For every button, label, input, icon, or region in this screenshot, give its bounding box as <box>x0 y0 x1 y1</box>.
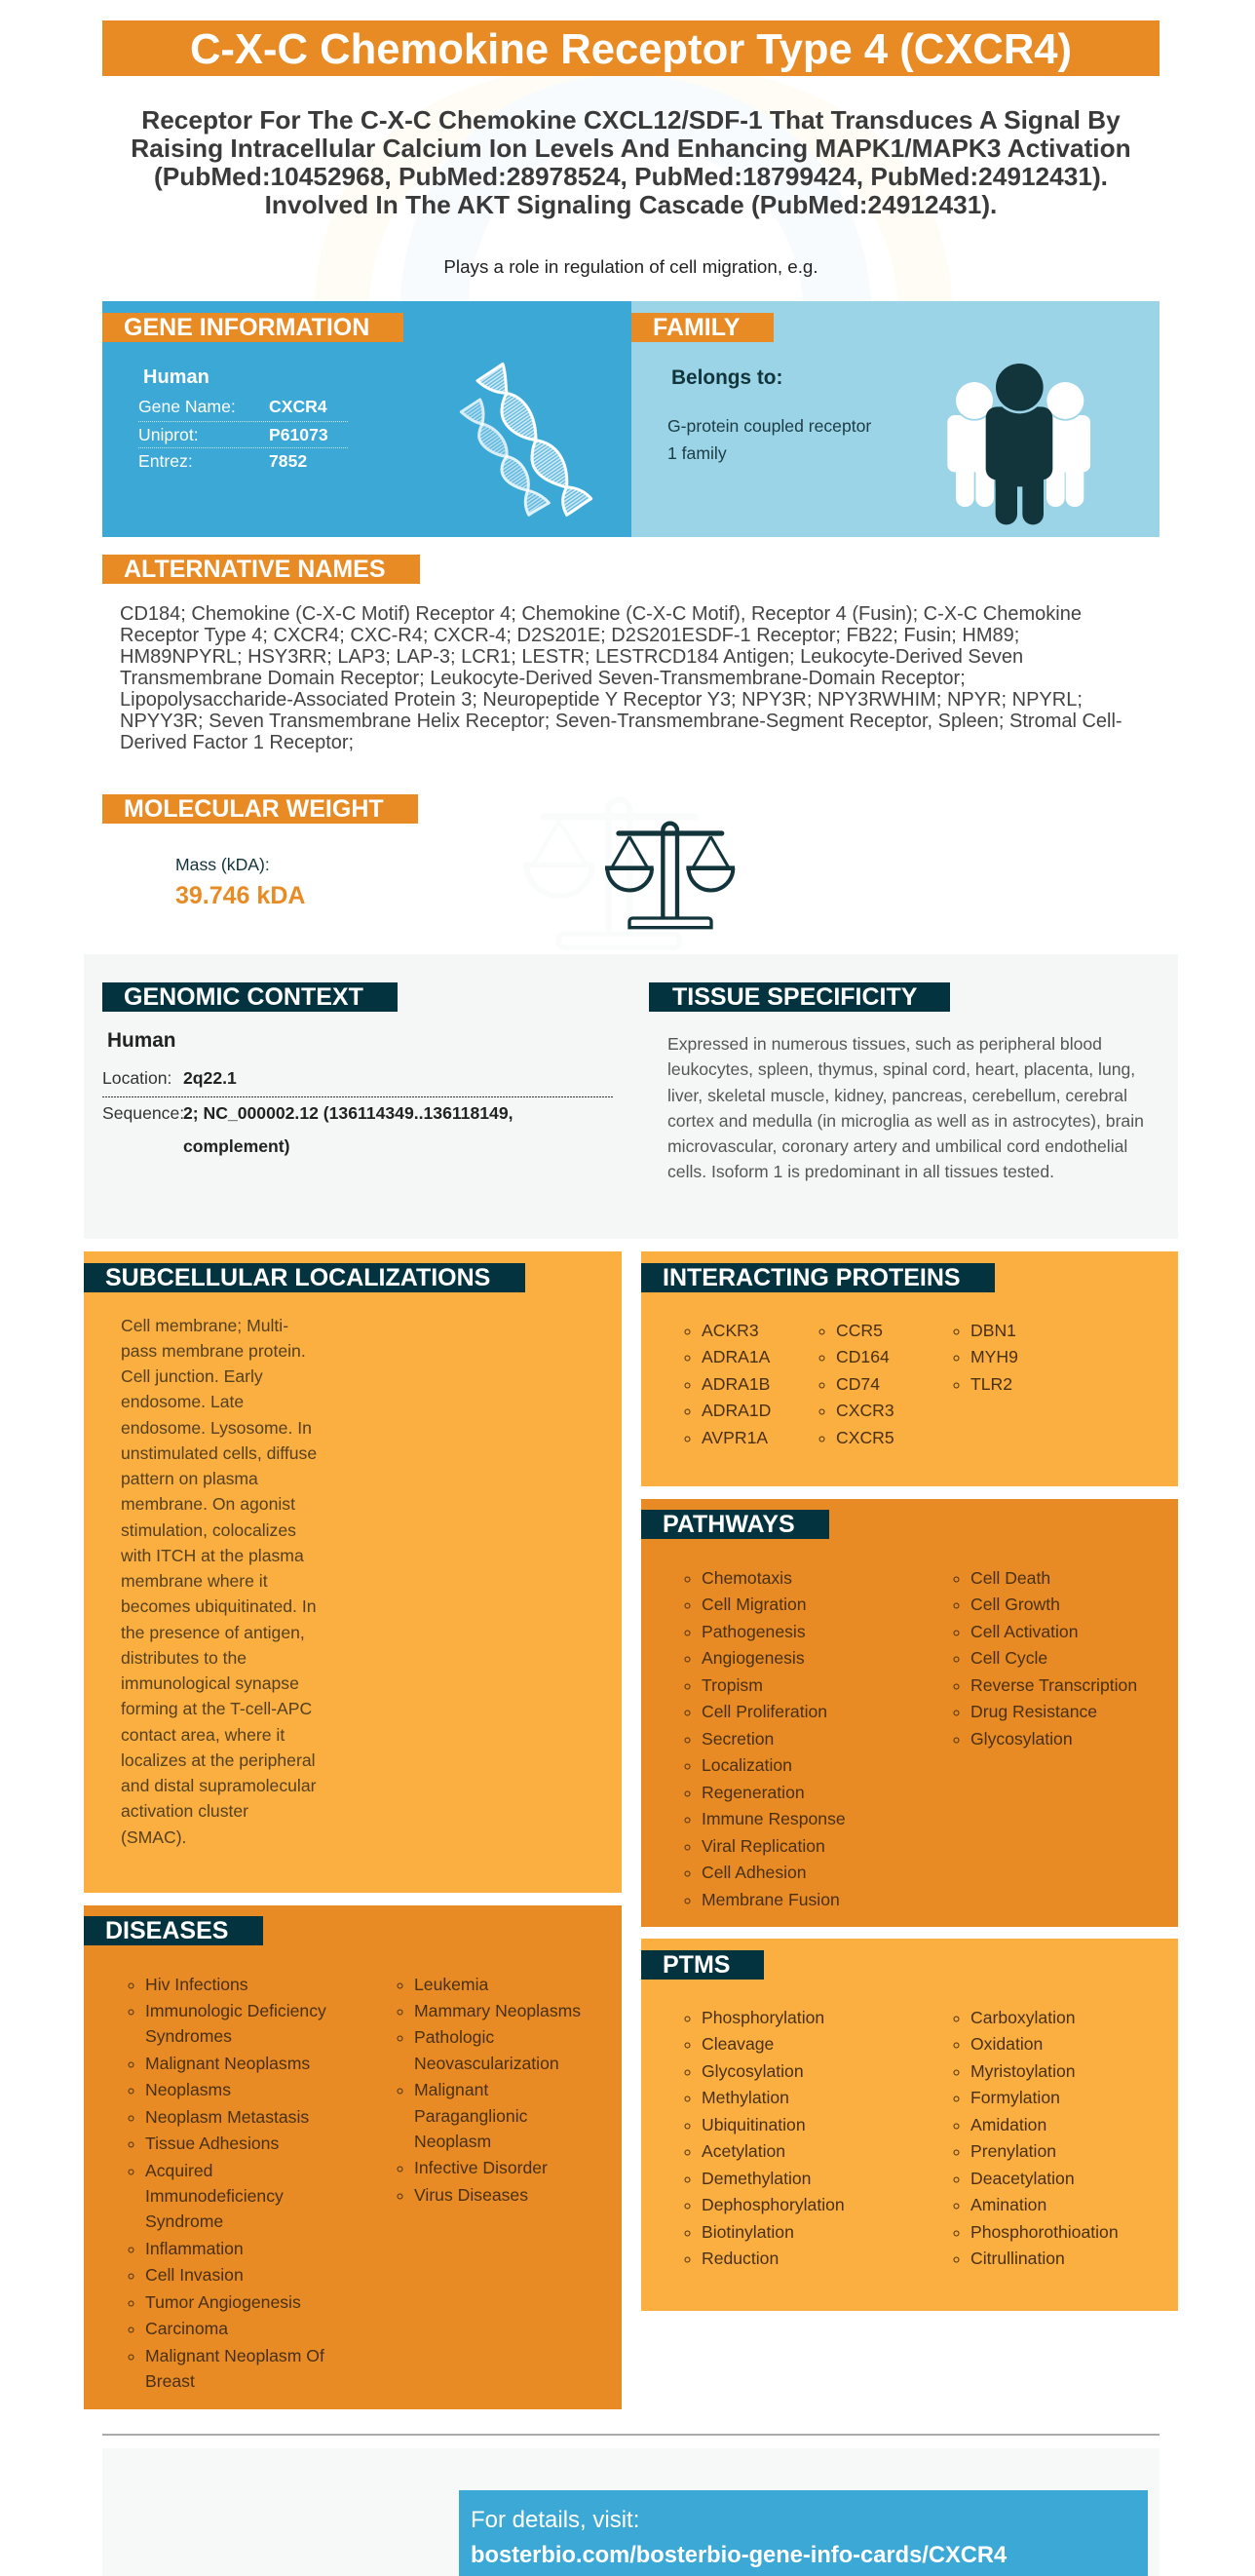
subcellular text: endosome. Late <box>121 1392 244 1411</box>
list: proteins column 3: TLR2 <box>970 1374 1012 1394</box>
subcellular text: contact area, where it <box>121 1725 285 1745</box>
subcellular text: forming at the T-cell-APC <box>121 1699 312 1718</box>
location row <box>102 1068 237 1088</box>
list: ptms column 2: Myristoylation <box>970 2061 1076 2081</box>
icon: dna <box>460 363 592 517</box>
list: diseases column 1: Malignant Neoplasms <box>145 2054 310 2073</box>
subcellular text: pass membrane protein. <box>121 1341 306 1361</box>
list: pathways column 1: Localization <box>702 1755 792 1775</box>
subcellular text <box>121 1316 317 1846</box>
list: ptms column 2: Prenylation <box>970 2141 1056 2161</box>
subtitle description: Raising Intracellular Calcium Ion Levels And Enhancing MAPK1/MAPK3 Activation <box>131 134 1131 163</box>
panel: ptms <box>641 1939 1178 2311</box>
panel: family <box>631 301 1160 537</box>
location row: Location: <box>102 1068 171 1088</box>
sequence row <box>102 1103 513 1156</box>
list: diseases column 1: Breast <box>145 2371 195 2391</box>
panel: diseases <box>84 1905 622 2409</box>
tissue specificity text: Expressed in numerous tissues, such as peripheral blood <box>667 1034 1102 1054</box>
list: diseases column 1: Acquired <box>145 2161 212 2180</box>
list: proteins column 2: CXCR5 <box>836 1428 894 1447</box>
list: diseases column 1: Syndromes <box>145 2026 232 2046</box>
callout: details link <box>459 2490 1148 2576</box>
mass label: Mass (kDA): <box>175 855 270 874</box>
function note: Plays a role in regulation of cell migration, e.g. <box>443 256 818 277</box>
background watermark <box>315 76 952 301</box>
list: ptms column 2: Phosphorothioation <box>970 2222 1119 2242</box>
list: ptms column 1: Ubiquitination <box>702 2115 806 2134</box>
list: pathways column 1: Tropism <box>702 1675 763 1695</box>
subcellular text: Cell junction. Early <box>121 1366 263 1386</box>
heading: gene information: GENE INFORMATION <box>124 314 369 341</box>
list: diseases column 1 <box>129 1975 326 2391</box>
heading: ptms: PTMS <box>663 1951 730 1979</box>
subcellular text: becomes ubiquitinated. In <box>121 1596 317 1616</box>
subcellular text: stimulation, colocalizes <box>121 1520 296 1540</box>
subtitle description: (PubMed:10452968, PubMed:28978524, PubMed:18799424, PubMed:24912431). <box>154 162 1108 191</box>
list: proteins column 1 <box>684 1321 771 1447</box>
list: pathways column 2: Cell Death <box>970 1568 1050 1588</box>
heading: diseases: DISEASES <box>105 1917 228 1944</box>
subcellular text: unstimulated cells, diffuse <box>121 1443 317 1463</box>
panel: subcellular localizations <box>84 1251 622 1893</box>
entrez row: 7852 <box>269 451 307 471</box>
alternative names text: HM89NPYRL; HSY3RR; LAP3; LAP-3; LCR1; LESTR; LESTRCD184 Antigen; Leukocyte-Derived Seven <box>120 646 1023 668</box>
list: diseases column 2: Neoplasm <box>414 2132 491 2151</box>
heading: pathways <box>641 1510 829 1539</box>
subtitle description: Involved In The AKT Signaling Cascade (PubMed:24912431). <box>265 190 997 219</box>
list: pathways column 2: Cell Cycle <box>970 1648 1047 1668</box>
list: ptms column 1: Cleavage <box>702 2034 774 2054</box>
list: ptms column 1: Methylation <box>702 2088 789 2107</box>
list: proteins column 1: AVPR1A <box>702 1428 768 1447</box>
list: pathways column 2: Drug Resistance <box>970 1702 1097 1721</box>
subcellular text: pattern on plasma <box>121 1469 258 1488</box>
tissue specificity text: microvascular, coronary artery and umbilical cord endothelial <box>667 1136 1127 1156</box>
list: diseases column 1: Syndrome <box>145 2211 223 2231</box>
list: ptms column 1: Phosphorylation <box>702 2008 824 2027</box>
heading: interacting proteins: INTERACTING PROTEINS <box>663 1264 961 1291</box>
list: proteins column 1: ACKR3 <box>702 1321 759 1340</box>
sequence row: Sequence: <box>102 1103 184 1123</box>
list: pathways column 1: Cell Adhesion <box>702 1863 807 1882</box>
list: diseases column 1: Tissue Adhesions <box>145 2134 279 2153</box>
list: ptms column 2: Citrullination <box>970 2249 1065 2268</box>
list: proteins column 1: ADRA1A <box>702 1347 770 1366</box>
tissue specificity text: liver, skeletal muscle, kidney, pancreas, cerebellum, cerebral <box>667 1086 1127 1105</box>
subtitle description: Receptor For The C-X-C Chemokine CXCL12/SDF-1 That Transduces A Signal By <box>141 105 1121 135</box>
subcellular text: activation cluster <box>121 1801 248 1821</box>
list: pathways column 2: Glycosylation <box>970 1729 1073 1749</box>
list: proteins column 2: CXCR3 <box>836 1401 894 1420</box>
icon: balance scale <box>605 821 735 930</box>
subcellular text: membrane. On agonist <box>121 1494 295 1514</box>
sequence row: 2; NC_000002.12 (136114349..136118149, <box>183 1103 513 1123</box>
list: diseases column 1: Neoplasms <box>145 2080 231 2099</box>
family description <box>667 416 871 463</box>
subcellular text: membrane where it <box>121 1571 268 1591</box>
uniprot row: P61073 <box>269 425 328 444</box>
list: ptms column 2: Oxidation <box>970 2034 1043 2054</box>
family description: G-protein coupled receptor <box>667 416 871 436</box>
list: proteins column 3: MYH9 <box>970 1347 1018 1366</box>
list: ptms column 2 <box>953 2008 1119 2268</box>
list: proteins column 2: CCR5 <box>836 1321 883 1340</box>
list: pathways column 2 <box>953 1568 1137 1749</box>
list: diseases column 1: Immunodeficiency <box>145 2186 284 2206</box>
alternative names text: Receptor Type 4; CXCR4; CXC-R4; CXCR-4; D2S201E; D2S201ESDF-1 Receptor; FB22; Fusin; HM89; <box>120 625 1019 646</box>
list: pathways column 2: Reverse Transcription <box>970 1675 1137 1695</box>
mass value: 39.746 kDA <box>175 882 305 909</box>
heading: tissue specificity: TISSUE SPECIFICITY <box>672 983 917 1011</box>
alternative names text: Transmembrane Domain Receptor; Leukocyte-Derived Seven-Transmembrane-Domain Receptor; <box>120 668 966 689</box>
alternative names text <box>120 603 1122 753</box>
list: ptms column 2: Deacetylation <box>970 2169 1075 2188</box>
list: ptms column 2: Amination <box>970 2195 1046 2214</box>
alternative names text: CD184; Chemokine (C-X-C Motif) Receptor 4; Chemokine (C-X-C Motif), Receptor 4 (Fusin); C-X-C Chemokine <box>120 603 1082 625</box>
subcellular text: distributes to the <box>121 1648 247 1668</box>
list: diseases column 2: Malignant <box>414 2080 488 2099</box>
list: ptms column 1: Acetylation <box>702 2141 785 2161</box>
subcellular text: Cell membrane; Multi- <box>121 1316 288 1335</box>
title: C-X-C Chemokine Receptor Type 4 (CXCR4) <box>190 26 1072 73</box>
list: proteins column 2: CD164 <box>836 1347 890 1366</box>
heading: genomic context: GENOMIC CONTEXT <box>124 983 363 1011</box>
subcellular text: the presence of antigen, <box>121 1622 305 1641</box>
subcellular text: localizes at the peripheral <box>121 1750 316 1770</box>
entrez row <box>138 451 307 471</box>
list: ptms column 1: Demethylation <box>702 2169 811 2188</box>
heading: family <box>631 313 774 342</box>
list: pathways column 1: Cell Migration <box>702 1595 807 1614</box>
list: pathways column 1: Secretion <box>702 1729 774 1749</box>
subcellular text: (SMAC). <box>121 1826 186 1846</box>
list: pathways column 1: Membrane Fusion <box>702 1889 840 1908</box>
list: ptms column 1: Biotinylation <box>702 2222 794 2242</box>
belongs to label: Belongs to: <box>671 366 782 389</box>
list: diseases column 1: Carcinoma <box>145 2319 228 2338</box>
panel: genomic context and tissue specificity <box>84 954 1178 1239</box>
list: diseases column 1: Cell Invasion <box>145 2265 244 2285</box>
subtitle description <box>131 105 1131 219</box>
list: ptms column 1: Glycosylation <box>702 2061 804 2081</box>
callout url: bosterbio.com/bosterbio-gene-info-cards/CXCR4 <box>471 2543 1007 2568</box>
list: diseases column 2: Mammary Neoplasms <box>414 2001 581 2020</box>
tissue specificity text: cells. Isoform 1 is predominant in all tissues tested. <box>667 1162 1054 1181</box>
gene name row: Gene Name: <box>138 397 236 416</box>
tissue specificity text: cortex and medulla (in microglia as well as in astrocytes), brain <box>667 1111 1144 1131</box>
alternative names text: Derived Factor 1 Receptor; <box>120 732 354 753</box>
icon: people <box>947 364 1090 524</box>
list: proteins column 1: ADRA1B <box>702 1374 770 1394</box>
family description: 1 family <box>667 443 727 463</box>
subcellular text: and distal supramolecular <box>121 1776 316 1795</box>
subcellular text: endosome. Lysosome. In <box>121 1417 312 1437</box>
list: diseases column 1: Tumor Angiogenesis <box>145 2292 301 2312</box>
panel: gene information <box>102 301 631 537</box>
list: diseases column 1: Neoplasm Metastasis <box>145 2107 309 2127</box>
list: ptms column 1: Reduction <box>702 2249 779 2268</box>
list: pathways column 1: Chemotaxis <box>702 1568 792 1588</box>
callout label: For details, visit: <box>471 2507 639 2533</box>
gene name row <box>138 397 348 422</box>
list: ptms column 1 <box>684 2008 845 2268</box>
panel: genomic context and tissue specificity: 2q22.1 <box>183 1068 237 1088</box>
list: proteins column 3 <box>953 1321 1018 1394</box>
heading: ptms <box>641 1950 764 1980</box>
list: proteins column 2 <box>818 1321 894 1447</box>
list: diseases column 2: Neovascularization <box>414 2054 559 2073</box>
alternative names text: Lipopolysaccharide-Associated Protein 3; Neuropeptide Y Receptor Y3; NPY3R; NPY3RWHIM; NPYR; NPYRL; <box>120 689 1083 711</box>
heading: family: FAMILY <box>653 314 740 341</box>
heading: diseases <box>84 1916 263 1945</box>
heading: pathways: PATHWAYS <box>663 1511 795 1538</box>
gene name row: CXCR4 <box>269 397 327 416</box>
alternative names text: NPYY3R; Seven Transmembrane Helix Receptor; Seven-Transmembrane-Segment Receptor, Spleen; Stromal Cell- <box>120 711 1122 732</box>
list: pathways column 1: Cell Proliferation <box>702 1702 827 1721</box>
uniprot row: Uniprot: <box>138 425 199 444</box>
panel: footer <box>102 2448 1160 2576</box>
panel: interacting proteins <box>641 1251 1178 1486</box>
list: diseases column 1: Malignant Neoplasm Of <box>145 2346 324 2365</box>
subcellular text: immunological synapse <box>121 1673 299 1693</box>
list: pathways column 2: Cell Growth <box>970 1595 1060 1614</box>
list: pathways column 1: Regeneration <box>702 1783 805 1802</box>
species label: Human <box>107 1029 175 1052</box>
list: pathways column 1: Immune Response <box>702 1809 846 1828</box>
list: pathways column 1: Pathogenesis <box>702 1622 806 1641</box>
list: ptms column 2: Formylation <box>970 2088 1060 2107</box>
list: diseases column 2: Paraganglionic <box>414 2106 527 2126</box>
list: ptms column 2: Amidation <box>970 2115 1046 2134</box>
list: ptms column 2: Carboxylation <box>970 2008 1076 2027</box>
list: pathways column 1: Angiogenesis <box>702 1648 805 1668</box>
tissue specificity text: leukocytes, spleen, thymus, spinal cord, heart, placenta, lung, <box>667 1059 1135 1079</box>
heading: alternative names: ALTERNATIVE NAMES <box>124 556 386 583</box>
tissue specificity text <box>667 1034 1144 1181</box>
heading: molecular weight: MOLECULAR WEIGHT <box>124 795 384 823</box>
list: pathways column 2: Cell Activation <box>970 1622 1079 1641</box>
list: pathways column 1 <box>684 1568 846 1908</box>
list: diseases column 2: Infective Disorder <box>414 2158 548 2177</box>
list: diseases column 1: Immunologic Deficiency <box>145 2001 326 2020</box>
sequence row: complement) <box>183 1136 290 1156</box>
species label: Human <box>143 366 209 388</box>
list: proteins column 3: DBN1 <box>970 1321 1016 1340</box>
subcellular text: with ITCH at the plasma <box>121 1546 304 1565</box>
list: proteins column 2: CD74 <box>836 1374 880 1394</box>
list: diseases column 2 <box>398 1975 581 2205</box>
list: diseases column 2: Pathologic <box>414 2027 494 2047</box>
list: diseases column 1: Inflammation <box>145 2239 244 2258</box>
list: diseases column 2: Virus Diseases <box>414 2185 528 2205</box>
list: pathways column 1: Viral Replication <box>702 1836 825 1856</box>
list: diseases column 2: Leukemia <box>414 1975 488 1994</box>
panel: pathways <box>641 1499 1178 1927</box>
list: proteins column 1: ADRA1D <box>702 1401 771 1420</box>
uniprot row <box>138 425 348 448</box>
list: ptms column 1: Dephosphorylation <box>702 2195 845 2214</box>
heading: subcellular localizations: SUBCELLULAR LOCALIZATIONS <box>105 1264 490 1291</box>
list: diseases column 1: Hiv Infections <box>145 1975 248 1994</box>
entrez row: Entrez: <box>138 451 193 471</box>
